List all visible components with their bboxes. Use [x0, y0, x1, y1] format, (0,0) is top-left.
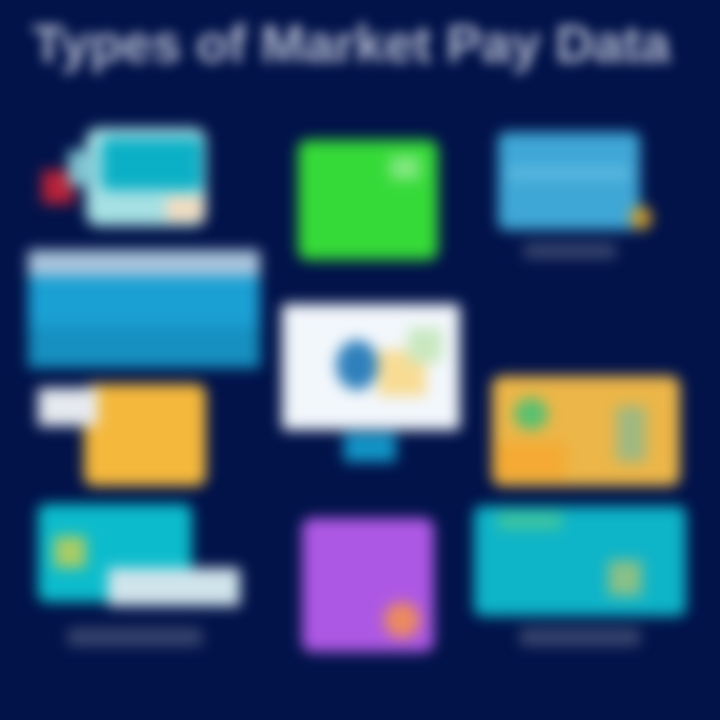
tag body — [86, 128, 206, 226]
panel: green card — [298, 140, 438, 260]
table header — [28, 250, 260, 276]
panel: teal card — [27, 493, 252, 652]
light block — [108, 568, 240, 606]
screen — [498, 132, 640, 230]
red accent — [42, 170, 74, 204]
connector — [68, 150, 94, 186]
caption — [520, 628, 640, 646]
panel: purple card — [302, 518, 434, 652]
orange dot — [630, 206, 652, 230]
panel: blue monitor card — [488, 122, 662, 265]
chart yellow — [378, 350, 426, 396]
highlight — [390, 156, 420, 180]
green dot — [514, 398, 548, 430]
chart green — [408, 328, 442, 362]
orange dot — [384, 602, 420, 638]
caption — [524, 244, 616, 258]
card — [474, 506, 686, 616]
panel: wide blue table — [28, 250, 260, 368]
panel: gold card — [492, 376, 680, 486]
panel: desktop monitor — [270, 292, 472, 472]
white tab — [38, 388, 98, 426]
header accent — [498, 512, 562, 530]
screen — [282, 304, 460, 430]
card — [38, 504, 192, 602]
card — [84, 384, 206, 486]
table band — [28, 326, 260, 368]
stand — [344, 434, 396, 462]
panel: price tag card — [31, 116, 218, 238]
yellow dot — [608, 560, 642, 596]
right graphic — [616, 406, 646, 462]
tag inner teal — [102, 138, 202, 190]
caption — [68, 628, 202, 646]
lower band — [496, 442, 566, 480]
panel: yellow note card — [26, 372, 218, 498]
chart blue — [336, 340, 378, 390]
yellow square — [54, 536, 86, 568]
corner accent — [166, 196, 204, 222]
title: Types of Market Pay Data — [32, 15, 670, 74]
panel: wide teal card — [463, 496, 697, 652]
light band — [508, 168, 630, 178]
